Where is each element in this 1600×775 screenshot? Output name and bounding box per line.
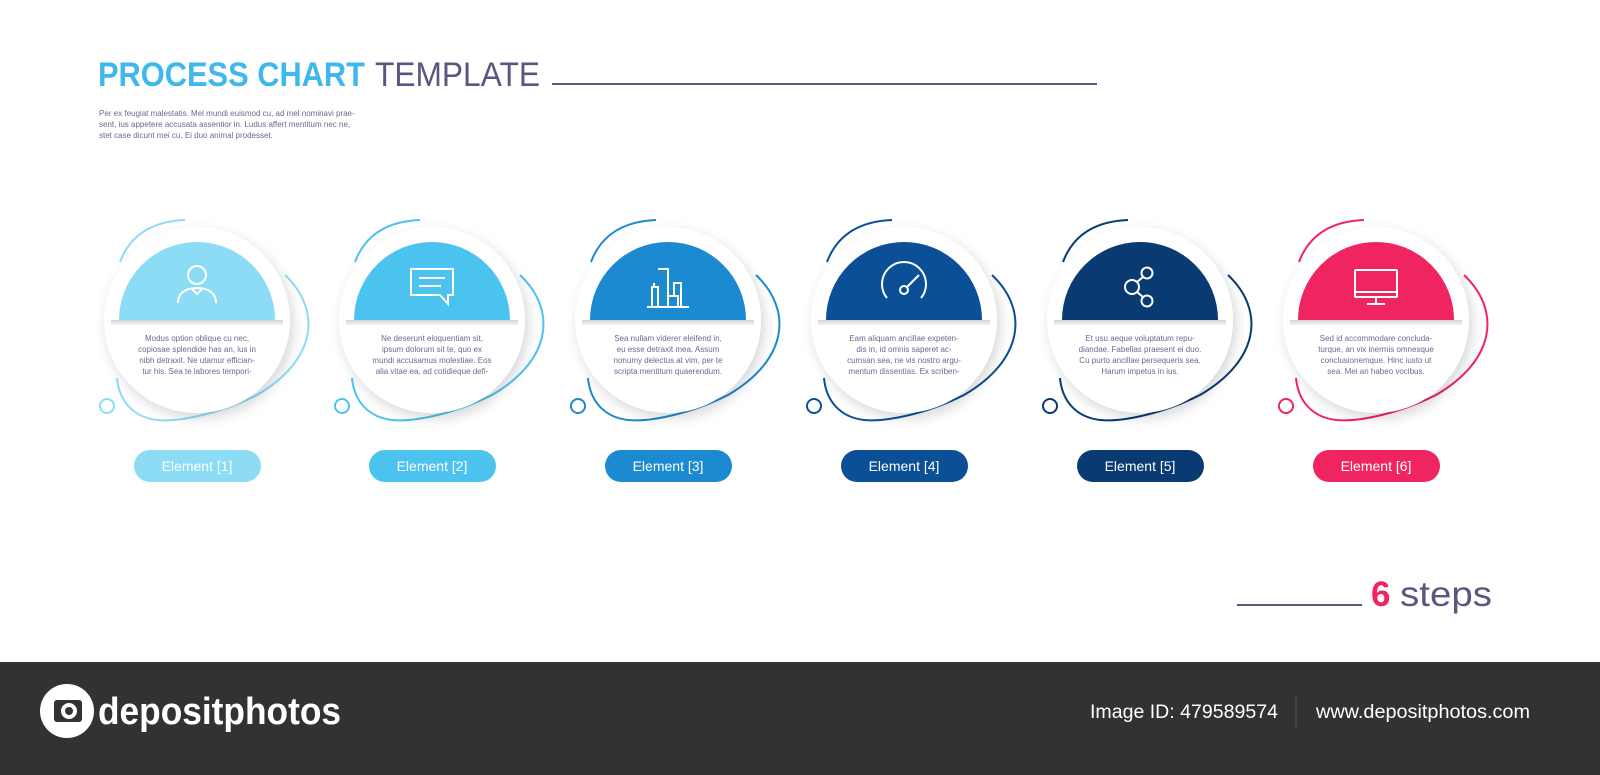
step 4: Element [4]	[869, 458, 939, 474]
step 5: Et usu aeque voluptatum repu-	[1085, 334, 1195, 343]
icon: chat	[411, 269, 453, 304]
step 5: diandae. Fabellas praesent ei duo.	[1079, 345, 1201, 354]
step 5: Harum impetus in ius.	[1101, 367, 1179, 376]
logo: depositphotos	[98, 691, 341, 733]
step 6	[1279, 220, 1487, 482]
intro text: Per ex feugiat malestatis. Mel mundi euismod cu, ad mel nominavi prae-	[99, 109, 355, 118]
intro text	[99, 109, 355, 140]
step 2: Ne deserunt eloquentiam sit,	[381, 334, 483, 343]
icon: buildings	[647, 269, 689, 307]
step 1: copiosae splendide has an, ius in	[138, 345, 256, 354]
step 4: dis in, id omnis saperet ac-	[856, 345, 952, 354]
logo	[40, 684, 341, 738]
step 2	[335, 220, 543, 482]
title	[98, 56, 1097, 94]
intro text: stet case dicunt mei cu. Ei duo animal prodesset.	[99, 131, 273, 140]
step 4: Eam aliquam ancillae expeten-	[849, 334, 959, 343]
footer bar: www.depositphotos.com	[1315, 702, 1530, 723]
icon: gauge	[882, 262, 926, 298]
6 steps label	[1237, 575, 1492, 614]
icon: monitor	[1355, 270, 1397, 304]
step 1: Element [1]	[162, 458, 232, 474]
step 6: turque, an vix inermis omnesque	[1318, 345, 1434, 354]
step 5: Cu purto ancillae persequeris sea.	[1079, 356, 1201, 365]
step 3	[571, 220, 779, 482]
step 3: scripta mentitum quaerendum.	[614, 367, 722, 376]
step 1: nibh detraxit. Ne utamur effician-	[139, 356, 255, 365]
6 steps label: steps	[1400, 575, 1492, 614]
step 6: Element [6]	[1341, 458, 1411, 474]
step 6: Sed id accommodare concluda-	[1320, 334, 1433, 343]
title: PROCESS CHART	[98, 56, 365, 94]
step 2: alia vitae ea, ad cotidieque defi-	[376, 367, 489, 376]
icon: person	[178, 266, 216, 303]
step 6: conclusionemque. Hinc iusto ut	[1321, 356, 1432, 365]
step 2: mundi accusamus molestiae. Eos	[372, 356, 492, 365]
step 3: nonumy delectus at vim, per te	[614, 356, 723, 365]
footer bar	[0, 662, 1600, 775]
step 4: cumsan sea, ne vis nostro argu-	[847, 356, 961, 365]
step 4	[807, 220, 1015, 482]
icon: share	[1125, 268, 1152, 306]
intro text: sent, ius appetere accusata assentior in. Ludus affert mentitum nec ne,	[99, 120, 350, 129]
step 2: Element [2]	[397, 458, 467, 474]
step 3: Sea nullam viderer eleifend in,	[614, 334, 722, 343]
step 1	[100, 220, 308, 482]
6 steps label: 6	[1371, 575, 1390, 614]
step 3: Element [3]	[633, 458, 703, 474]
step 3: eu esse detraxit mea. Assum	[617, 345, 720, 354]
step 2: ipsum dolorum sit te, quo ex	[382, 345, 482, 354]
step 5	[1043, 220, 1251, 482]
step 5: Element [5]	[1105, 458, 1175, 474]
step 1: Modus option oblique cu nec,	[145, 334, 249, 343]
step 6: sea. Mei an habeo vocibus.	[1327, 367, 1425, 376]
step 4: mentum dissentias. Ex scriben-	[848, 367, 960, 376]
title: TEMPLATE	[375, 56, 540, 94]
step 1: tur his. Sea te labores tempori-	[142, 367, 252, 376]
image id: Image ID: 479589574	[1090, 702, 1278, 723]
